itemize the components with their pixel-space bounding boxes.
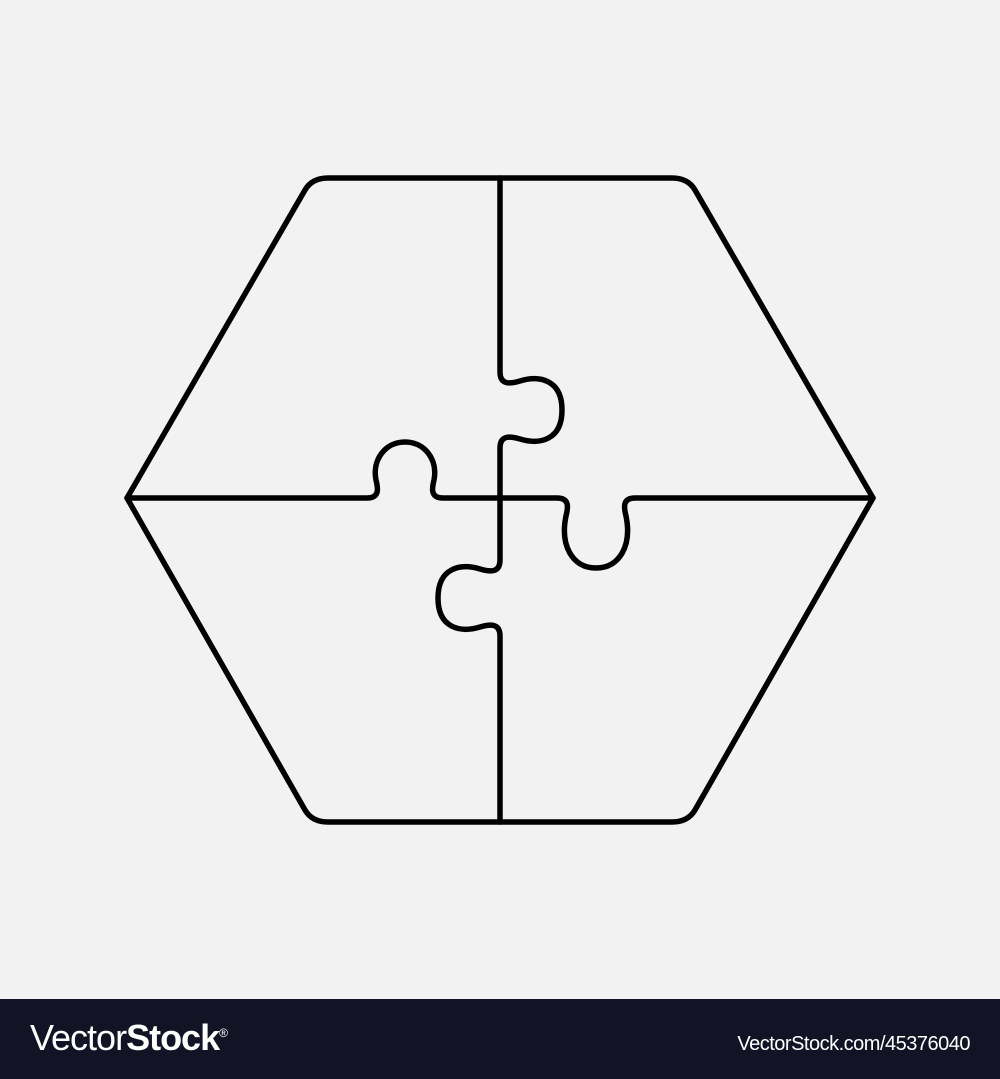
vertical seam with tabs — [438, 178, 562, 822]
horizontal seam with tabs — [127, 442, 873, 568]
hexagon outline — [127, 178, 873, 822]
logo text: VectorStock® — [30, 1017, 227, 1058]
image id text: VectorStock.com/45376040 — [737, 1033, 970, 1055]
footer bar — [0, 999, 1000, 1079]
